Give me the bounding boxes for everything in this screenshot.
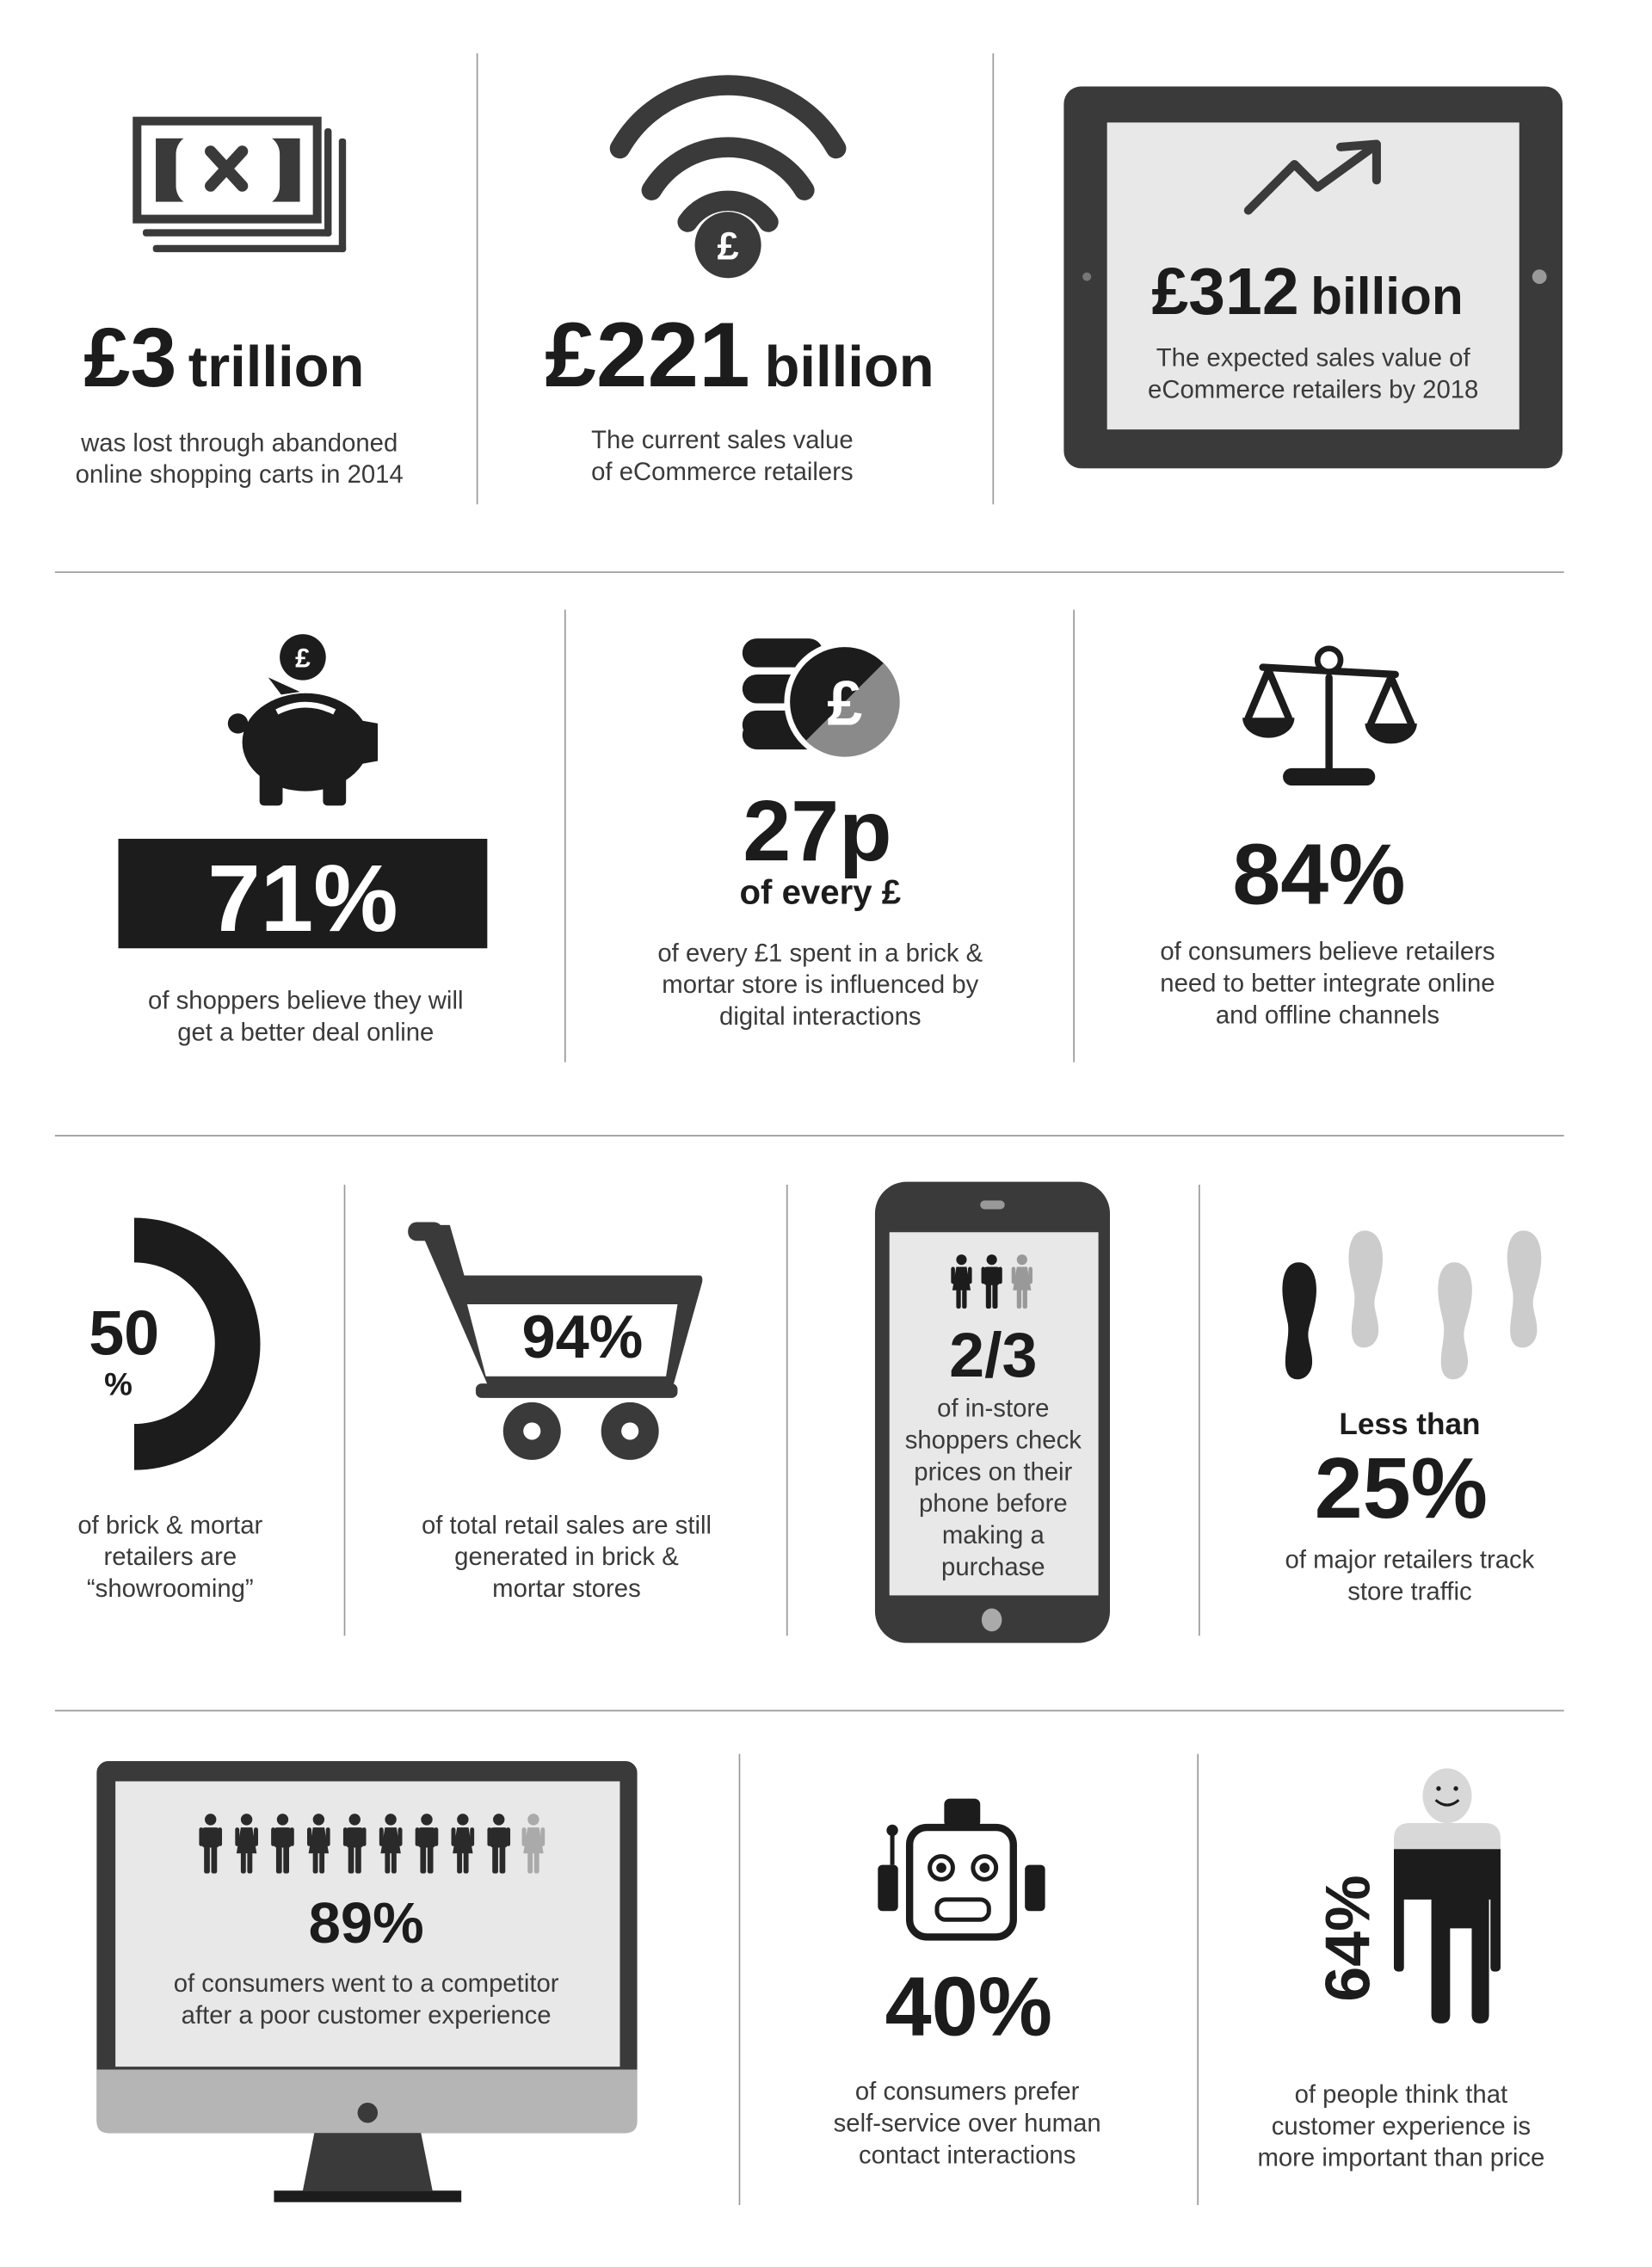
caption: of eCommerce retailers (591, 458, 854, 486)
caption: “showrooming” (87, 1574, 254, 1603)
heading: 84% (1232, 826, 1405, 922)
panel: robot 40% (834, 1799, 1101, 2169)
caption: of consumers went to a competitor (174, 1969, 559, 1998)
heading: £312 billion (1151, 255, 1464, 329)
chart: half donut (134, 1217, 261, 1470)
panel: 27p: of every £ (739, 872, 901, 911)
panel: tablet £312 billion (1063, 87, 1563, 468)
caption: prices on their (914, 1457, 1073, 1486)
caption: need to better integrate online (1160, 969, 1495, 997)
panel: monitor 89%: 89% (309, 1891, 424, 1956)
panel: 50% (77, 1217, 262, 1603)
caption: phone before (919, 1489, 1068, 1518)
caption: making a (942, 1521, 1045, 1549)
caption: eCommerce retailers by 2018 (1148, 375, 1478, 404)
caption: of major retailers track (1285, 1546, 1535, 1574)
caption: of consumers believe retailers (1160, 938, 1495, 966)
panel: 25%: 25% (1315, 1440, 1488, 1537)
panel: 94% (408, 1223, 712, 1603)
panel: 25%: Less than (1339, 1408, 1480, 1441)
panel: £221 billion: £ (718, 225, 739, 268)
caption: The expected sales value of (1156, 343, 1470, 372)
icon: coin stack: £ (827, 668, 862, 739)
caption: mortar stores (492, 1574, 641, 1603)
caption: of every £1 spent in a brick & (657, 939, 983, 967)
caption: online shopping carts in 2014 (76, 460, 404, 489)
caption: was lost through abandoned (80, 428, 398, 457)
caption: retailers are (103, 1543, 237, 1571)
caption: customer experience is (1272, 2112, 1531, 2141)
panel: person 64%: 64% (1312, 1875, 1384, 2002)
caption: after a poor customer experience (182, 2001, 552, 2030)
caption: mortar store is influenced by (662, 970, 979, 999)
panel: £221 billion (545, 85, 934, 486)
caption: of people think that (1295, 2080, 1507, 2109)
icon: people row (199, 1814, 545, 1874)
caption: more important than price (1257, 2144, 1544, 2172)
caption: and offline channels (1216, 1001, 1439, 1029)
caption: The current sales value (591, 426, 854, 454)
heading: £221 billion: £221 billion (545, 303, 934, 406)
icon: person (1394, 1768, 1501, 2024)
panel: person 64% (1257, 1768, 1544, 2172)
panel: monitor 89% (96, 1761, 638, 2202)
panel: 84% (1160, 649, 1495, 1029)
caption: of brick & mortar (77, 1511, 262, 1539)
icon: wifi pound (620, 85, 836, 222)
panel: 27p (657, 638, 983, 1031)
caption: get a better deal online (177, 1018, 434, 1046)
caption: of total retail sales are still (422, 1511, 712, 1539)
caption: store traffic (1347, 1577, 1472, 1605)
caption: digital interactions (719, 1002, 922, 1031)
icon: people (951, 1254, 1032, 1309)
icon: footprints (1282, 1230, 1541, 1379)
caption: shoppers check (905, 1426, 1082, 1455)
caption: self-service over human (834, 2110, 1101, 2138)
panel: phone 2/3: 2/3 (949, 1319, 1038, 1390)
icon: trend arrow (1248, 145, 1377, 211)
icon: piggy bank: £ (295, 643, 311, 674)
icon: money stack (137, 121, 346, 252)
icon: cart (408, 1223, 702, 1460)
caption: of in-store (937, 1395, 1049, 1423)
panel: 50%: 50 (89, 1297, 159, 1369)
caption: purchase (941, 1553, 1045, 1581)
caption: of shoppers believe they will (148, 987, 463, 1015)
caption: generated in brick & (454, 1543, 679, 1571)
caption: of consumers prefer (855, 2078, 1080, 2106)
icon: coin stack (743, 638, 905, 762)
heading: 27p (743, 783, 892, 879)
heading: £3 trillion: £3 trillion (83, 311, 364, 404)
icon: robot (878, 1799, 1045, 1937)
panel: robot 40%: 40% (885, 1959, 1052, 2053)
caption: contact interactions (859, 2141, 1076, 2169)
panel: 94%: 94% (522, 1303, 643, 1371)
panel: 25% (1282, 1230, 1541, 1605)
panel: £3 trillion (76, 121, 404, 489)
stat bar: 71% (207, 846, 398, 952)
panel: phone 2/3 (875, 1182, 1110, 1643)
icon: scales (1248, 668, 1411, 770)
icon: piggy bank (228, 634, 378, 805)
panel: 50%: % (104, 1367, 133, 1402)
panel: 71% (119, 634, 487, 1046)
stat bar (119, 839, 487, 952)
